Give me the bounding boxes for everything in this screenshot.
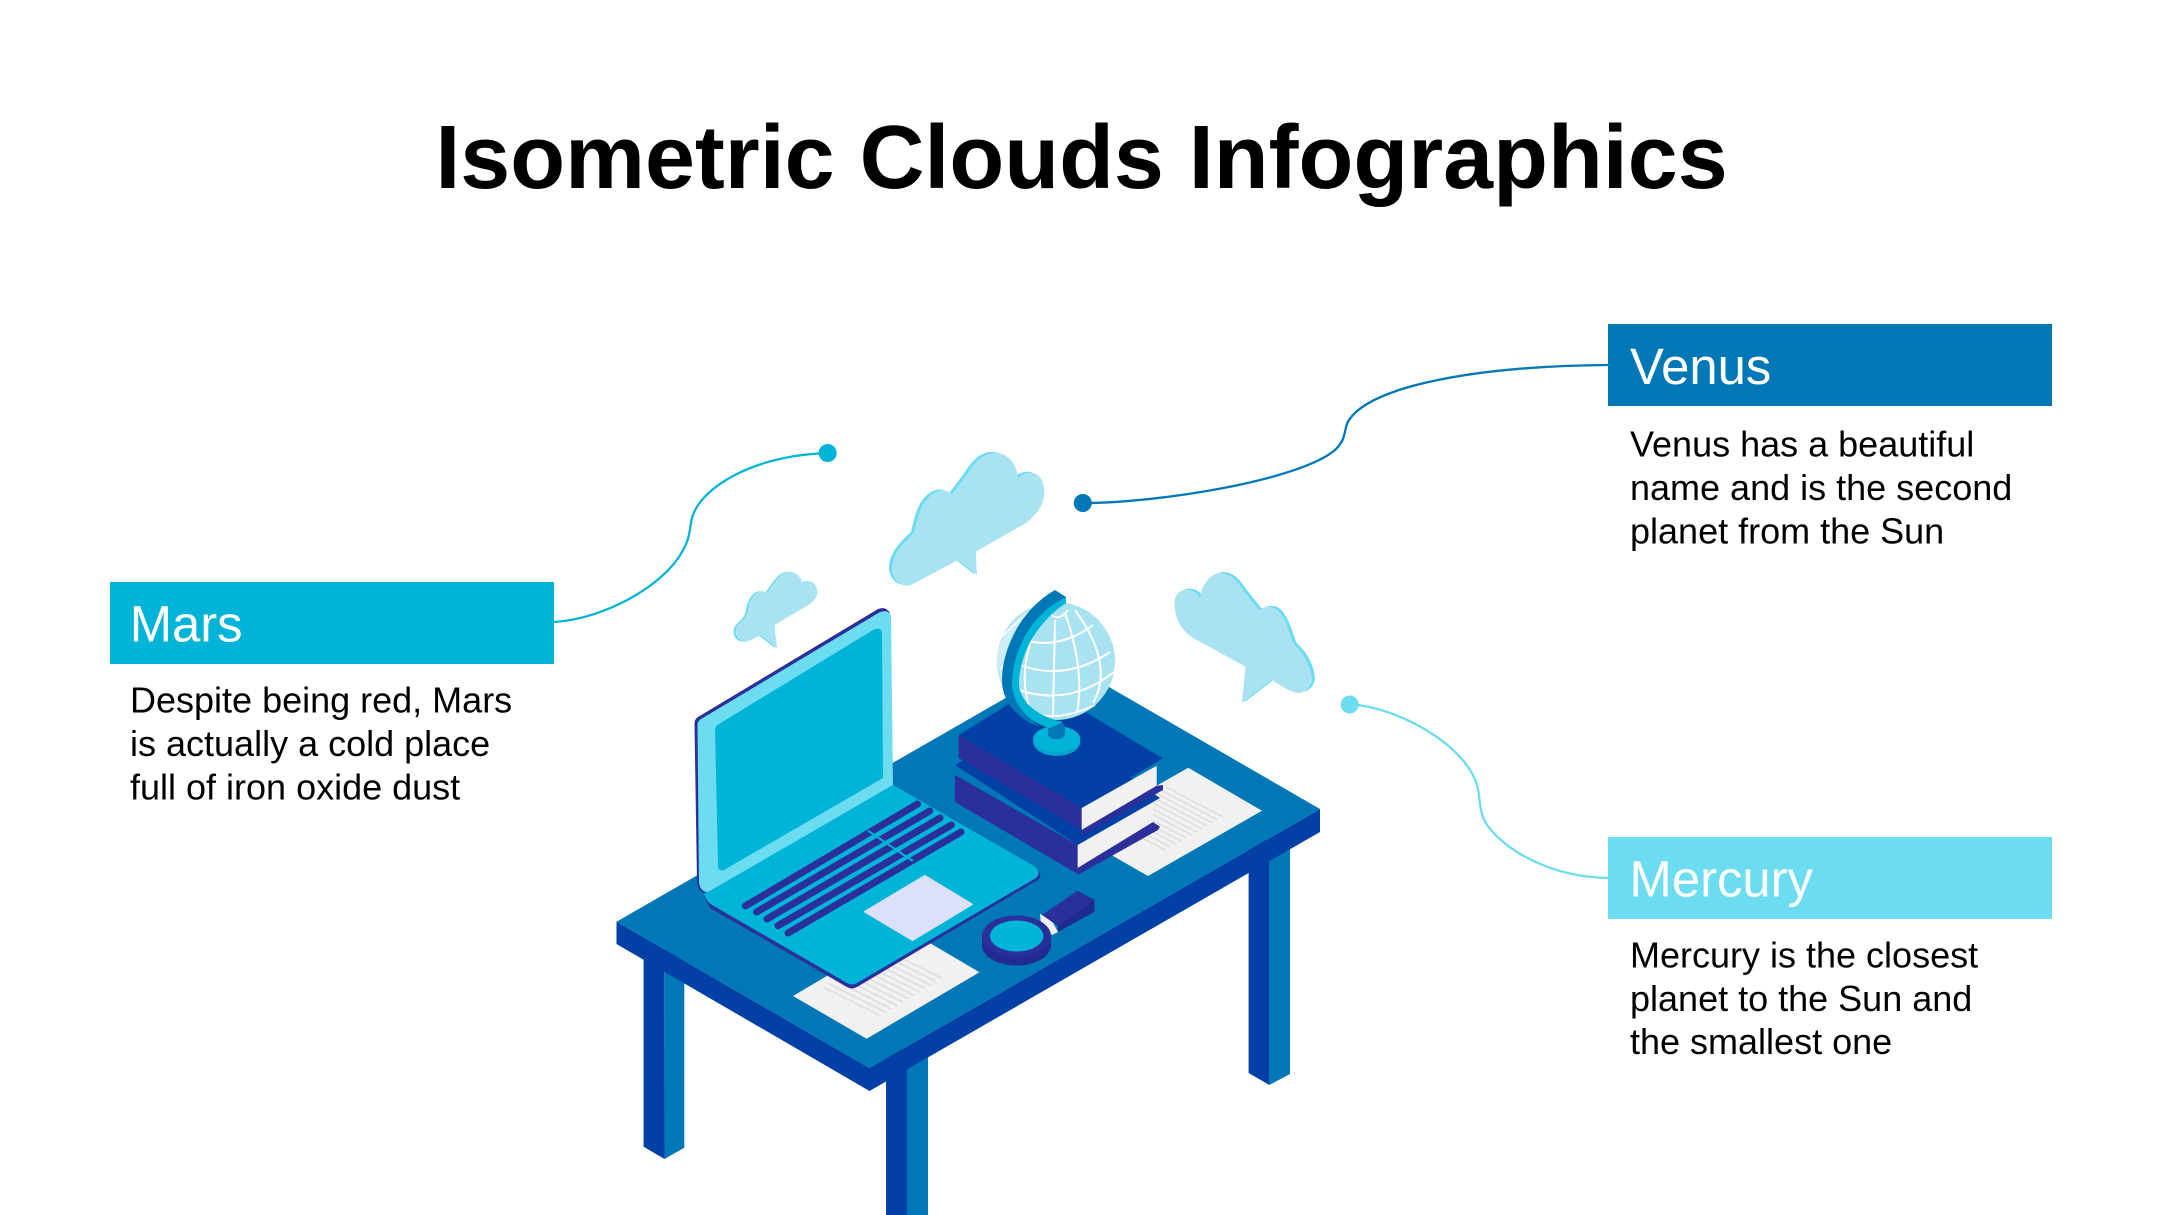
Venus heading: Venus <box>1630 338 1771 395</box>
Mars description: Despite being red, Mars <box>130 680 512 721</box>
panel: Mercury <box>1608 837 2052 1062</box>
Mars description: full of iron oxide dust <box>130 766 460 807</box>
laptop trackpad <box>865 876 972 940</box>
icon: right cloud <box>1174 572 1315 703</box>
Mars heading: Mars <box>130 596 243 653</box>
icon: magnifying glass <box>982 891 1094 966</box>
handle <box>1042 891 1094 932</box>
Mercury header bar <box>1608 837 2052 919</box>
lens glass <box>990 920 1043 952</box>
globe base <box>1033 722 1080 756</box>
Mars header bar <box>110 582 554 664</box>
illustration: desk <box>616 663 1320 1215</box>
connector: Mars <box>554 444 837 622</box>
connector: Venus <box>1074 365 1608 512</box>
icon: stacked books <box>955 685 1163 875</box>
panel: Mars <box>110 582 554 807</box>
connector: Mercury <box>1341 696 1608 878</box>
icon: laptop <box>694 608 1040 988</box>
desk top surface <box>616 663 1320 1068</box>
laptop lid <box>694 608 893 893</box>
paper sheet right <box>1073 768 1262 876</box>
Mercury description: Mercury is the closest <box>1630 935 1978 976</box>
laptop keyboard base <box>704 785 1039 984</box>
icon: large cloud <box>889 452 1044 586</box>
Venus header bar <box>1608 324 2052 406</box>
icon: small cloud <box>734 572 818 648</box>
globe arm <box>1002 590 1066 728</box>
Venus description: planet from the Sun <box>1630 510 1944 551</box>
upper book <box>959 685 1163 836</box>
title: Isometric Clouds Infographics <box>435 108 1728 208</box>
Mars description: is actually a cold place <box>130 723 490 764</box>
desk top sides <box>616 809 1320 1091</box>
Mercury heading: Mercury <box>1630 851 1814 908</box>
lower book <box>955 715 1160 875</box>
icon: globe <box>997 590 1115 756</box>
paper sheet front <box>793 929 980 1039</box>
desk leg left <box>644 950 684 1159</box>
Venus description: name and is the second <box>1630 467 2012 508</box>
globe sphere <box>997 596 1115 720</box>
Venus description: Venus has a beautiful <box>1630 424 1974 465</box>
Mercury description: planet to the Sun and <box>1630 978 1972 1019</box>
desk leg front <box>886 1050 928 1215</box>
Mercury description: the smallest one <box>1630 1021 1892 1062</box>
desk leg right <box>1249 840 1290 1085</box>
lens body <box>982 936 1051 966</box>
panel: Venus <box>1608 324 2052 551</box>
handle collar <box>1040 914 1058 935</box>
laptop keyboard keys <box>745 804 961 933</box>
laptop screen <box>715 629 883 870</box>
laptop base edge <box>704 788 1040 988</box>
